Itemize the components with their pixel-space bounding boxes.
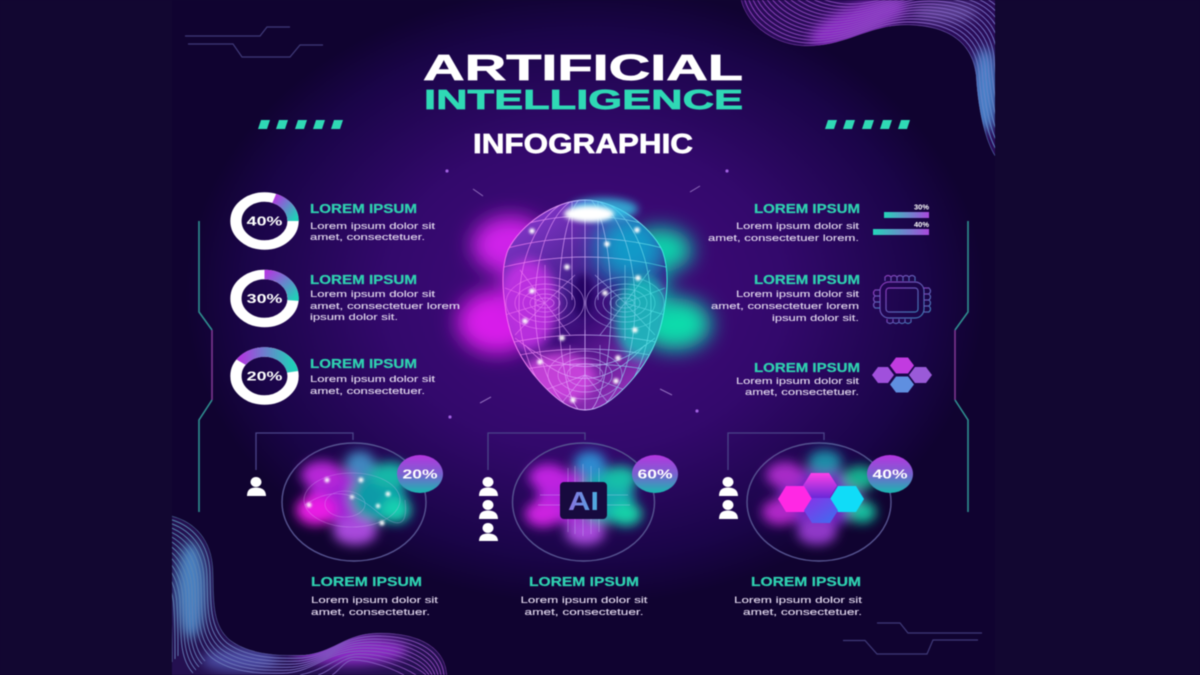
side bracket: right — [955, 221, 968, 512]
body text — [310, 221, 435, 243]
percent badge — [632, 455, 678, 493]
body text — [711, 289, 859, 324]
right item 1 — [708, 201, 929, 244]
body text: ipsum dolor sit. — [772, 313, 859, 324]
icon: person — [247, 477, 266, 496]
bottom panel 2 — [479, 433, 678, 618]
glow blob — [525, 451, 642, 545]
circuit lines: bottom right — [843, 623, 982, 654]
body text: ipsum dolor sit. — [310, 312, 398, 323]
glowing hexagons — [778, 473, 864, 523]
brain lines and node lights — [304, 473, 406, 527]
glow blob — [762, 450, 877, 545]
ring — [512, 443, 654, 561]
percent badge — [867, 455, 913, 493]
decorative wave: top right — [740, 0, 996, 156]
icon: three people — [479, 477, 498, 541]
title — [423, 47, 743, 159]
bottom panel 3 — [719, 433, 913, 618]
decorative wave: bottom left — [171, 516, 448, 675]
heading: LOREM IPSUM — [310, 201, 417, 216]
sparkles around face — [445, 169, 729, 419]
body text: amet, consectetuer lorem — [310, 301, 460, 312]
body text: amet, consectetuer. — [745, 387, 859, 398]
body text: amet, consectetuer. — [310, 386, 425, 397]
dashes: right — [825, 120, 910, 129]
body text — [736, 376, 859, 398]
dashes: left — [258, 120, 343, 129]
title line: artificial: ARTIFICIAL — [423, 47, 743, 88]
connector line — [728, 433, 824, 470]
donut chart: 20% — [236, 352, 293, 400]
icon: microchip — [874, 276, 930, 324]
percent badge: 20% — [402, 466, 438, 482]
percent badge: 60% — [638, 466, 673, 482]
face glow blobs — [457, 216, 711, 354]
body text: Lorem ipsum dolor sit — [734, 595, 863, 606]
title line: infographic: INFOGRAPHIC — [473, 128, 693, 159]
body text: Lorem ipsum dolor sit — [736, 221, 859, 232]
donut chart: 30% — [236, 274, 293, 322]
percent badge: 40% — [872, 466, 908, 482]
body text: amet, consectetuer. — [743, 607, 862, 618]
donut chart: 20%: 20% — [247, 370, 282, 383]
heading: LOREM IPSUM — [310, 272, 417, 287]
mini bar chart: 30% — [914, 202, 929, 212]
heading: LOREM IPSUM — [310, 356, 417, 371]
heading: LOREM IPSUM — [754, 360, 860, 375]
body text: Lorem ipsum dolor sit — [311, 595, 439, 606]
forehead highlight — [564, 198, 638, 222]
side bracket: left — [199, 221, 212, 512]
circuit lines: top left — [185, 27, 323, 57]
body text: amet, consectetuer lorem — [711, 301, 859, 312]
ring — [282, 443, 426, 561]
face mesh — [500, 197, 670, 413]
donut chart: 40% — [236, 197, 293, 245]
heading: LOREM IPSUM — [529, 574, 639, 589]
body text: Lorem ipsum dolor sit — [310, 289, 435, 300]
left item 3 — [236, 352, 435, 400]
percent badge — [397, 455, 443, 493]
body text — [311, 595, 439, 618]
connector line — [488, 433, 585, 470]
right item 3 — [736, 358, 932, 398]
body text: Lorem ipsum dolor sit — [736, 376, 859, 387]
circuit traces — [538, 464, 630, 536]
connector line — [256, 433, 353, 470]
body text — [310, 289, 460, 323]
central face illustration — [457, 197, 711, 413]
left item 1 — [236, 197, 435, 245]
title line: intelligence: INTELLIGENCE — [424, 84, 743, 115]
bottom panel 1 — [247, 433, 443, 618]
icon: hexagons — [872, 358, 932, 392]
heading: LOREM IPSUM — [751, 574, 861, 589]
icon: two people — [719, 477, 738, 519]
face shading — [497, 212, 671, 404]
AI chip — [560, 482, 607, 519]
donut chart: 40%: 40% — [247, 215, 282, 228]
heading: LOREM IPSUM — [311, 574, 422, 589]
body text: Lorem ipsum dolor sit — [520, 595, 648, 606]
face outline — [503, 200, 667, 410]
body text — [708, 221, 859, 244]
ring — [747, 443, 891, 561]
body text: amet, consectetuer. — [311, 607, 430, 618]
face node lights — [522, 227, 641, 403]
mini bar chart: 40% — [914, 220, 929, 229]
left item 2 — [236, 272, 460, 323]
panel: infographic background — [172, 0, 995, 675]
body text — [734, 595, 863, 618]
body text: Lorem ipsum dolor sit — [736, 289, 859, 300]
glow blob — [296, 451, 411, 545]
right item 2 — [711, 272, 930, 324]
body text — [520, 595, 648, 618]
AI chip: AI — [568, 486, 599, 516]
body text: amet, consectetuer lorem. — [708, 233, 859, 244]
heading: LOREM IPSUM — [754, 272, 860, 287]
body text: Lorem ipsum dolor sit — [310, 221, 435, 232]
face fill — [503, 200, 667, 410]
body text: amet, consectetuer. — [524, 607, 644, 618]
mini bar chart — [873, 202, 929, 235]
body text: amet, consectetuer. — [310, 232, 425, 243]
donut chart: 30%: 30% — [247, 292, 282, 306]
body text — [310, 374, 435, 397]
heading: LOREM IPSUM — [754, 201, 860, 216]
body text: Lorem ipsum dolor sit — [310, 374, 435, 385]
